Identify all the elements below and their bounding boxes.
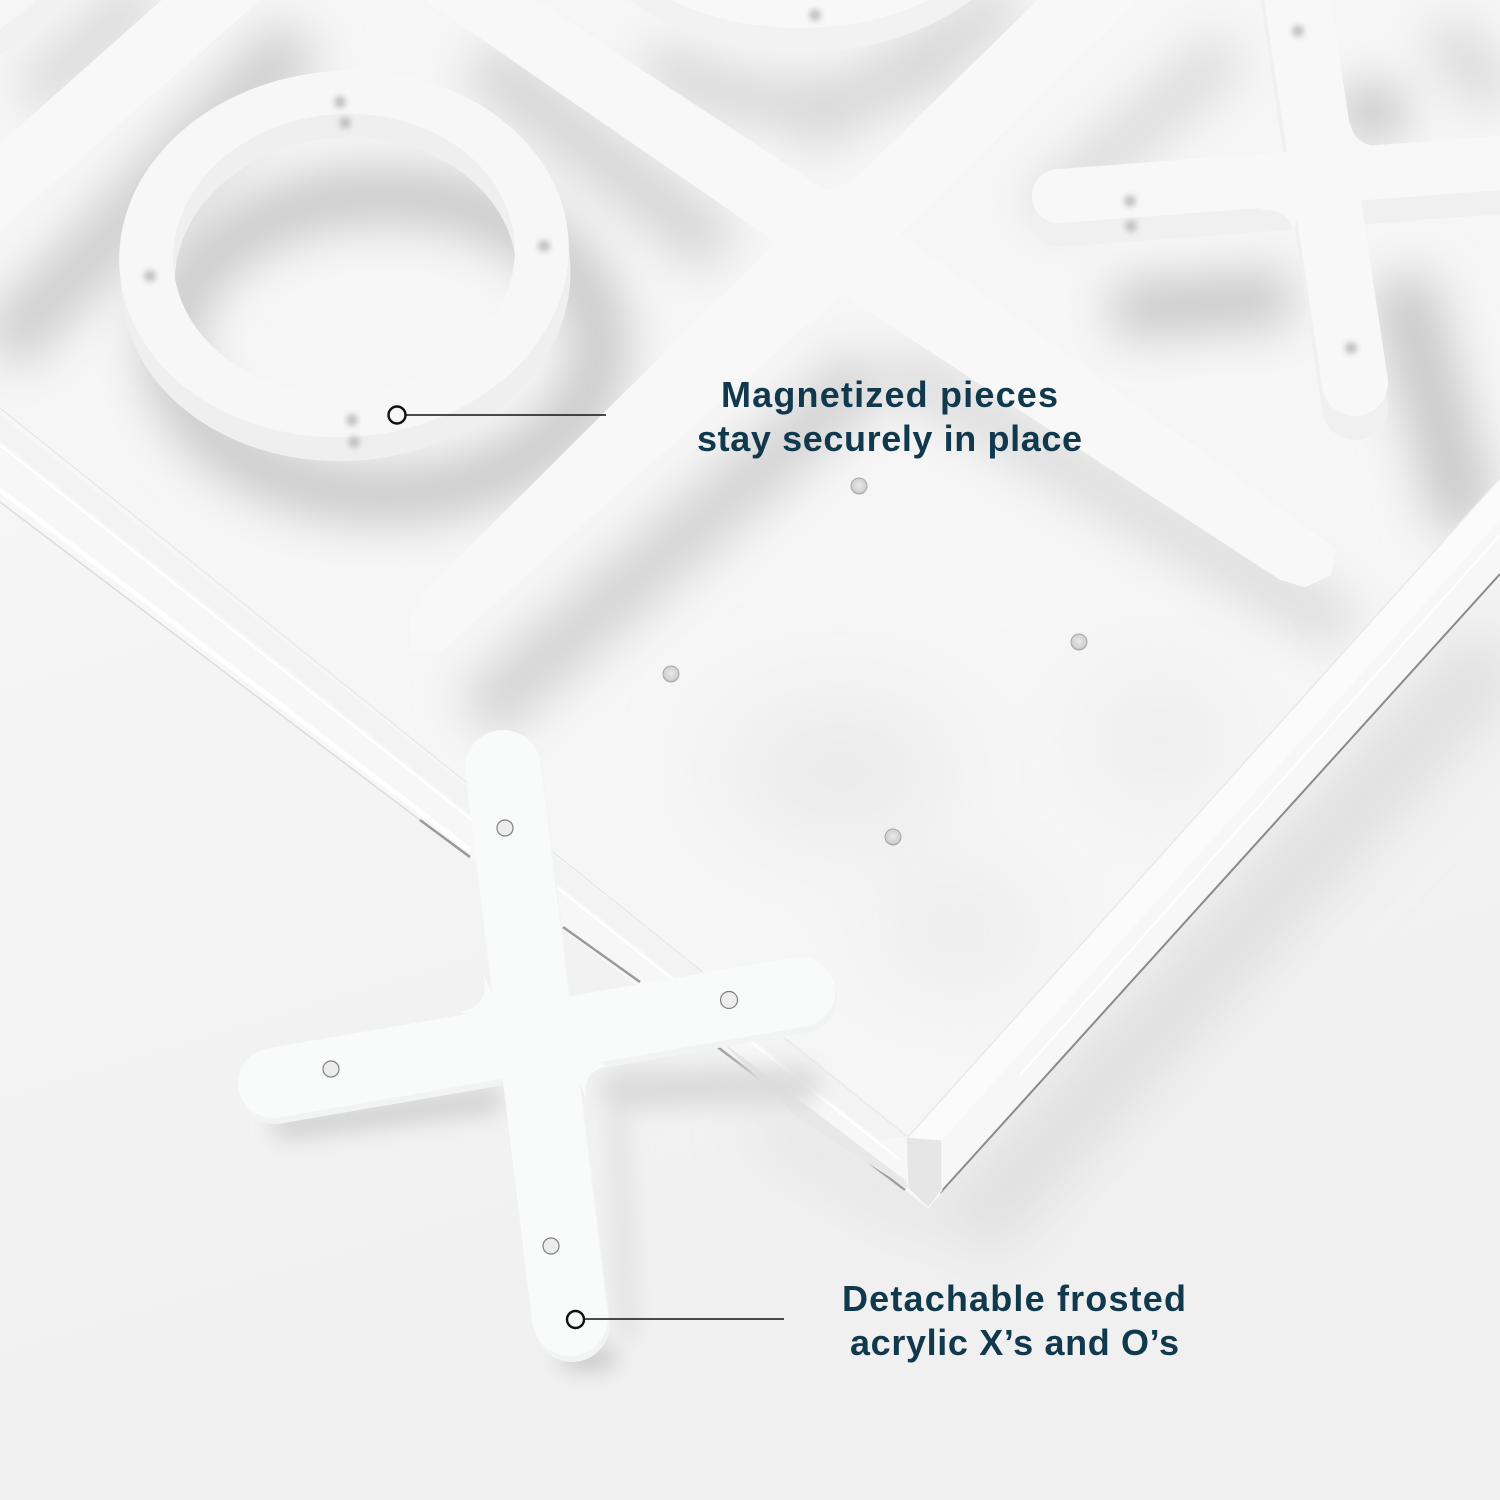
callout: detachable frosted pieces: Detachable frosted	[842, 1278, 1186, 1319]
blurred magnets inside pieces	[144, 9, 1357, 448]
foreground X piece	[273, 768, 802, 1324]
grid bar: upper left	[0, 0, 261, 230]
callout: magnetized pieces: stay securely in place	[697, 418, 1082, 459]
main O piece	[107, 56, 583, 476]
magnets on board	[663, 478, 1087, 845]
X piece: top face	[273, 768, 800, 1318]
X piece: lower edge	[275, 774, 802, 1324]
callout: detachable frosted pieces	[567, 1278, 1186, 1363]
top X piece	[1059, 0, 1500, 407]
board corner	[906, 1137, 942, 1208]
board shadows	[0, 0, 1500, 808]
grid bars: central cross	[412, 0, 1333, 648]
callout: detachable frosted pieces: acrylic X’s and O’s	[850, 1322, 1179, 1363]
magnets in foreground X	[323, 820, 738, 1254]
callout: magnetized pieces: Magnetized pieces	[721, 374, 1058, 415]
board grid: frosted bars	[0, 0, 1333, 648]
callout: magnetized pieces	[388, 374, 1082, 459]
foreground X shadow	[285, 1085, 800, 1370]
board cast shadow	[760, 650, 1500, 1235]
clear acrylic rim	[0, 405, 1500, 1208]
X piece: corner fillets	[460, 975, 608, 1100]
top left O piece	[0, 0, 55, 45]
top O piece	[560, 0, 1040, 53]
board plate	[0, 0, 1500, 1137]
